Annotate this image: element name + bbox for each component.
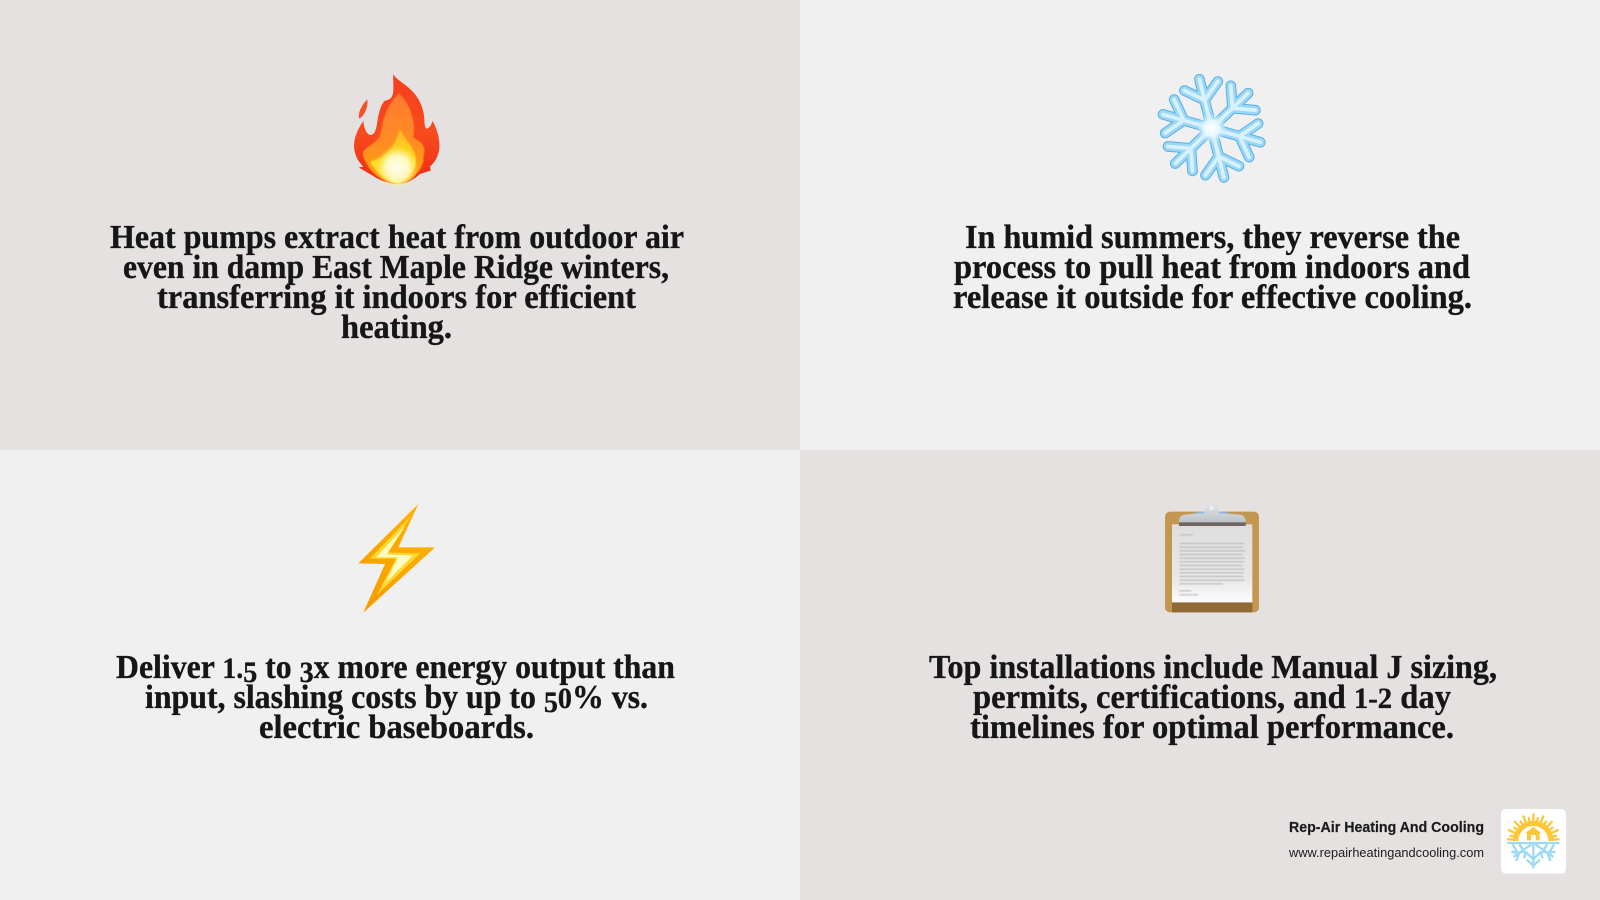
text: installation description: Top installations include Manual J sizing,: [929, 649, 1497, 686]
icon: clipboard: [1165, 504, 1259, 612]
text: installation description: [929, 649, 1497, 746]
logo: sun and snowflake: [1501, 809, 1566, 874]
icon: flame: [354, 74, 439, 189]
text: efficiency description: % vs.: [572, 679, 653, 716]
text: installation description: timelines for optimal performance.: [970, 709, 1454, 746]
text: efficiency description: [116, 649, 675, 746]
panel: efficiency: [0, 450, 800, 900]
text: heating description: [110, 219, 684, 346]
text: efficiency description: to: [257, 649, 300, 686]
panel: cooling: [800, 0, 1600, 450]
text: heating description: even in damp East Maple Ridge winters,: [123, 249, 669, 286]
text: efficiency description: Deliver 1.: [116, 649, 245, 686]
panel: heating: [0, 0, 800, 450]
text: heating description: heating.: [341, 309, 452, 346]
text: efficiency description: x more energy output than: [314, 649, 675, 686]
panel: installation: [800, 450, 1600, 900]
text: efficiency description: electric baseboards.: [259, 709, 534, 746]
text: heating description: transferring it indoors for efficient: [157, 279, 637, 316]
icon: lightning bolt: [358, 504, 435, 613]
text: cooling description: process to pull heat from indoors and: [954, 249, 1470, 286]
text: efficiency description: 0: [558, 682, 572, 715]
text: efficiency description: 5: [544, 686, 558, 719]
text: efficiency description: input, slashing costs by up to: [145, 679, 563, 716]
text: cooling description: release it outside for effective cooling.: [953, 279, 1472, 316]
footer: company name and website: [1288, 820, 1484, 860]
text: cooling description: In humid summers, they reverse the: [965, 219, 1460, 256]
footer: company name and website: Rep-Air Heating And Cooling: [1289, 820, 1484, 836]
text: heating description: Heat pumps extract heat from outdoor air: [110, 219, 684, 256]
text: efficiency description: 3: [300, 656, 314, 689]
text: efficiency description: 5: [243, 656, 257, 689]
text: cooling description: [953, 219, 1472, 316]
icon: snowflake: [1158, 75, 1265, 182]
text: installation description: permits, certifications, and 1-2 day: [973, 679, 1451, 716]
footer: company name and website: www.repairheatingandcooling.com: [1288, 845, 1484, 860]
